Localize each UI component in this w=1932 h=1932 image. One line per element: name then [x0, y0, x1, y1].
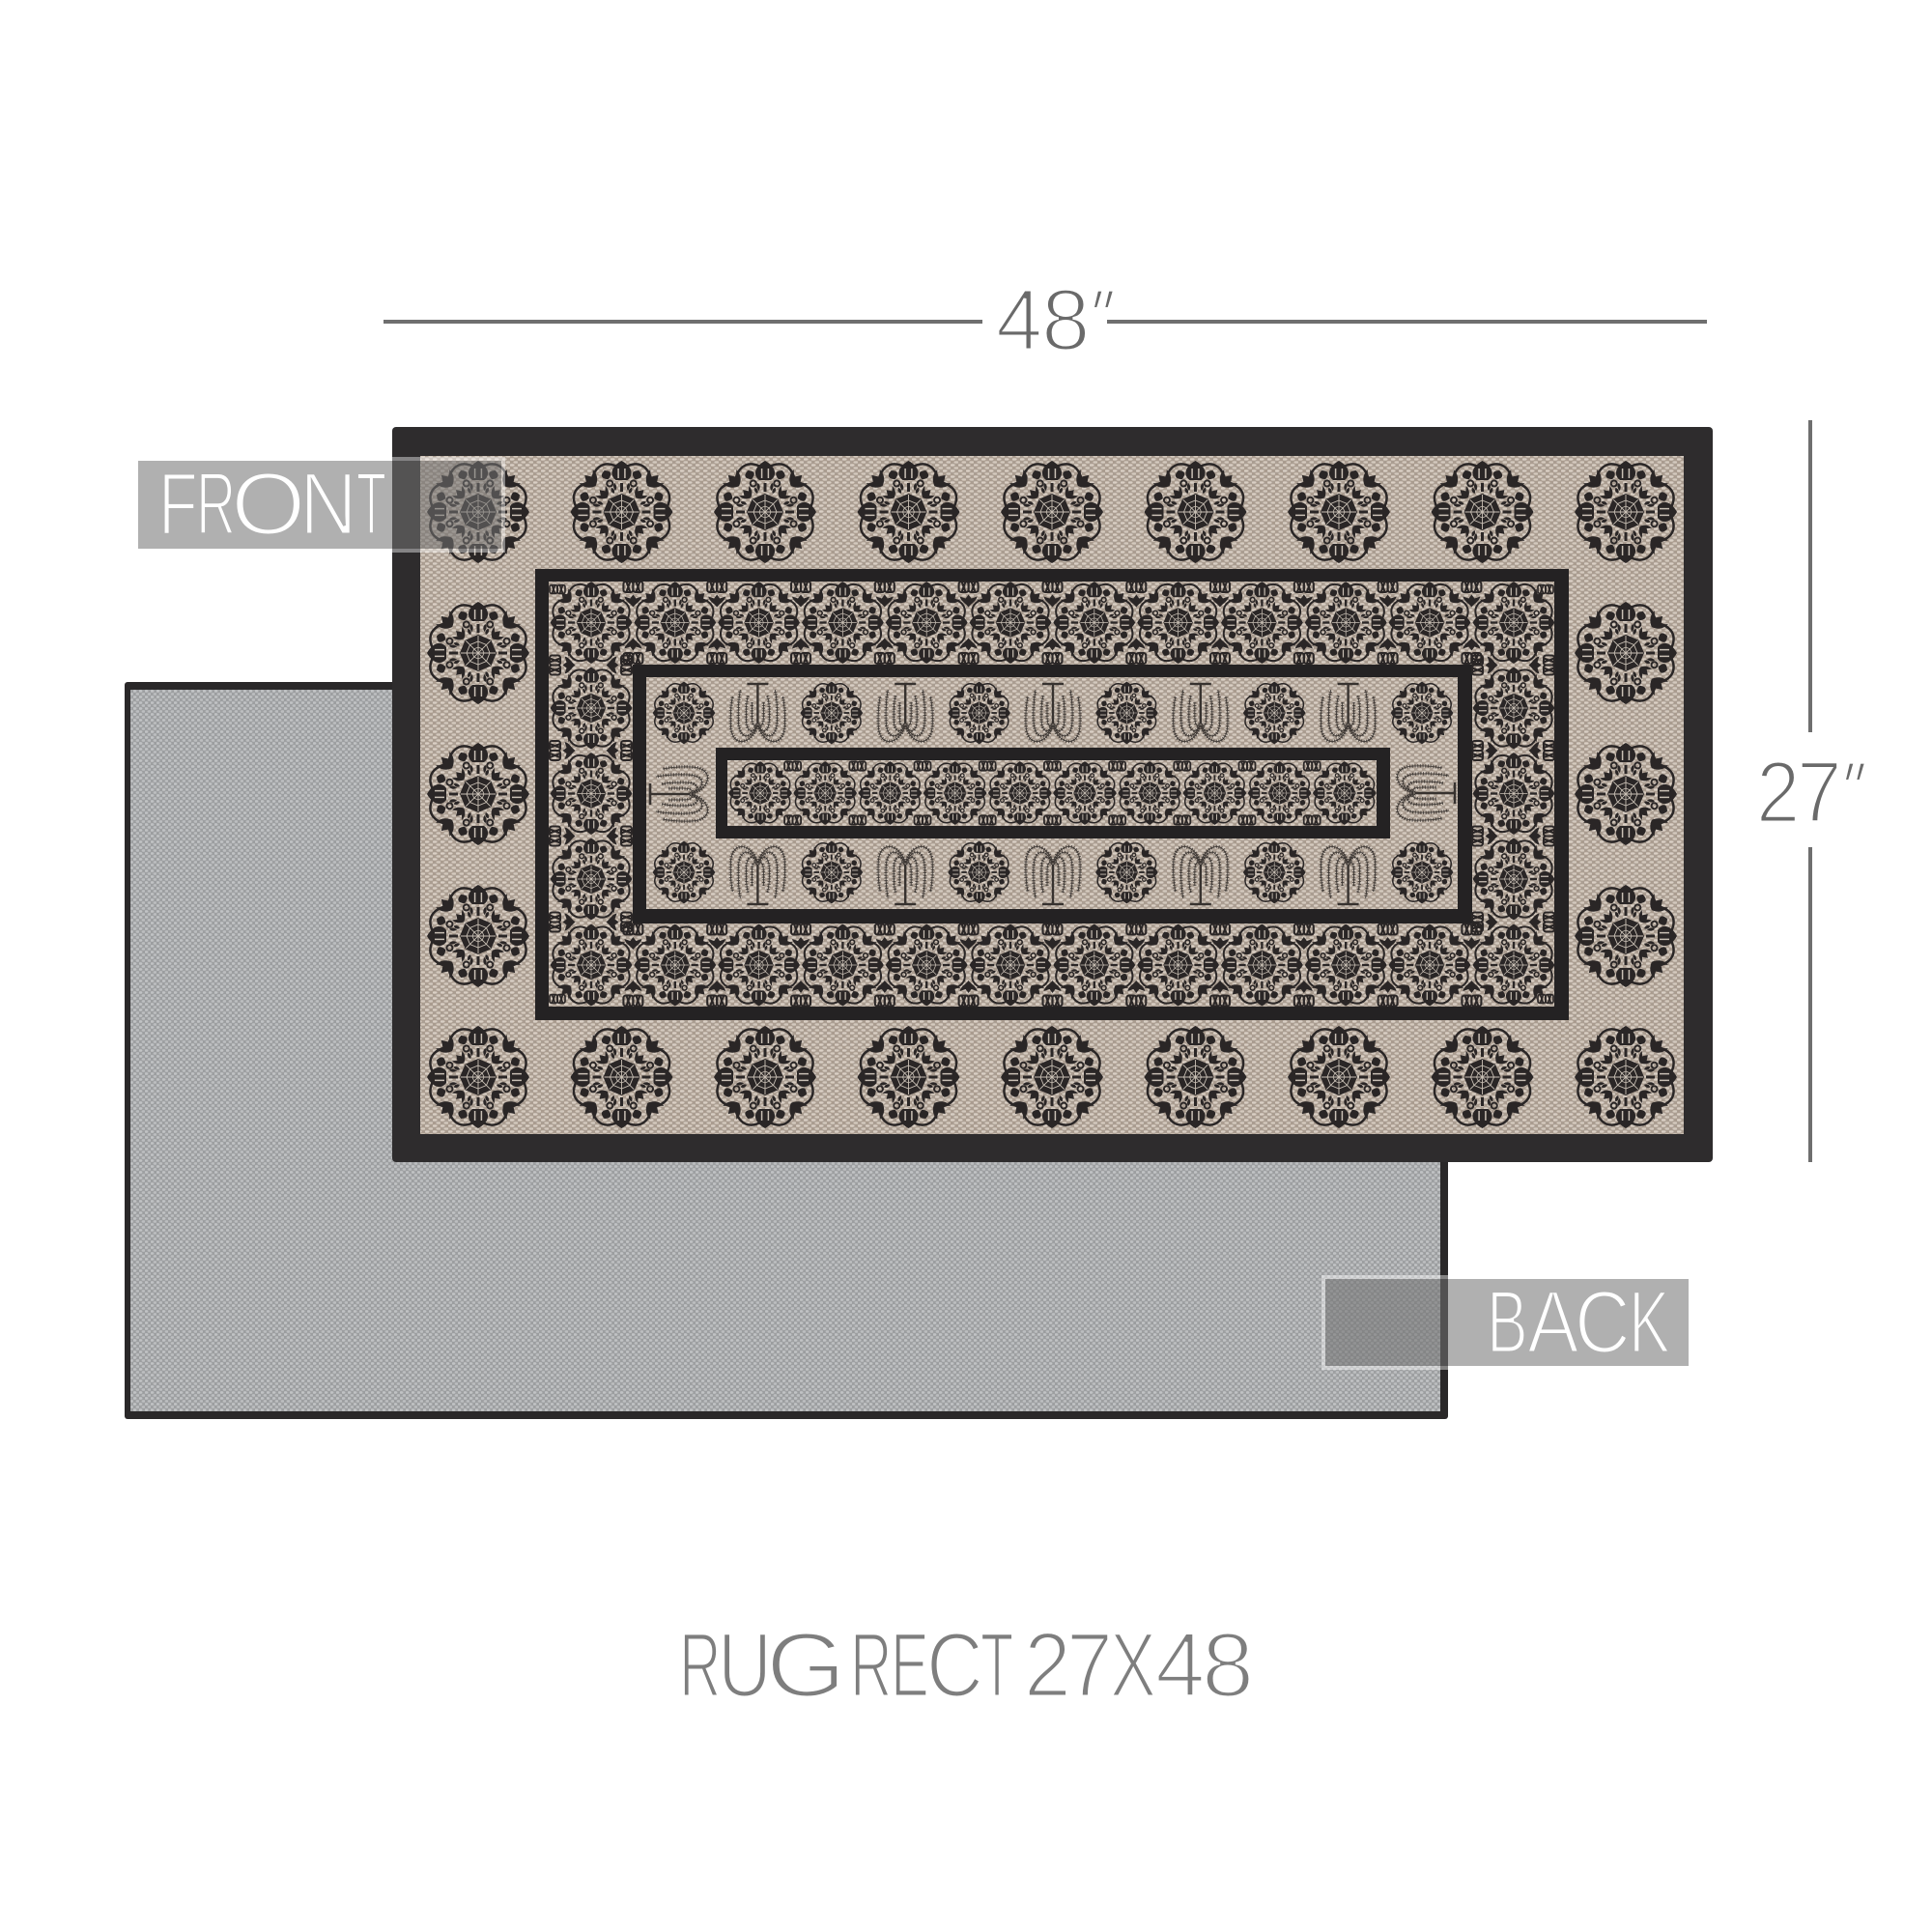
product caption: 7 — [1066, 1614, 1113, 1717]
BACK label text: K — [1629, 1273, 1670, 1372]
front of rug — [392, 427, 1713, 1162]
product caption: 2 — [1024, 1614, 1071, 1717]
woven beige field — [420, 456, 1684, 1134]
center medallion strip — [727, 760, 1377, 826]
dense medallion band — [550, 581, 1555, 1007]
height label 27 inches: 7 — [1797, 745, 1842, 841]
FRONT label text: O — [231, 455, 305, 554]
BACK label text: C — [1575, 1273, 1631, 1372]
product caption — [679, 1614, 1254, 1717]
black frame: center band — [716, 748, 1390, 838]
product caption: E — [891, 1614, 929, 1717]
outer medallion ring — [426, 460, 1678, 1129]
product caption: C — [926, 1614, 982, 1717]
BACK label text: B — [1487, 1273, 1527, 1372]
product caption: T — [980, 1614, 1013, 1717]
black frame: outer band — [535, 569, 1569, 1020]
height label 27 inches: 2 — [1756, 745, 1800, 841]
back of rug — [125, 682, 1448, 1419]
FRONT label text: N — [299, 455, 357, 554]
product caption: R — [679, 1614, 722, 1717]
FRONT label text: R — [195, 455, 236, 554]
BACK label text — [1487, 1273, 1670, 1372]
product caption: 8 — [1202, 1614, 1254, 1717]
outer black binding — [392, 427, 1713, 1162]
product caption: U — [718, 1614, 772, 1717]
height label 27 inches: " — [1826, 745, 1873, 841]
product caption: X — [1110, 1614, 1156, 1717]
height label 27 inches — [1756, 745, 1873, 841]
FRONT label text: F — [158, 455, 197, 554]
width label 48 inches — [996, 272, 1122, 369]
back woven surface — [130, 690, 1440, 1411]
width label 48 inches: " — [1074, 272, 1122, 369]
FRONT label text: T — [356, 455, 386, 554]
back label box — [1321, 1275, 1692, 1370]
product caption: R — [850, 1614, 893, 1717]
width label 48 inches: 4 — [996, 272, 1043, 369]
width label 48 inches: 8 — [1041, 272, 1090, 369]
width dimension line — [384, 320, 1707, 324]
black frame: middle band — [633, 665, 1472, 923]
product caption: 4 — [1155, 1614, 1206, 1717]
product caption: G — [766, 1614, 846, 1717]
willow trees — [650, 684, 1455, 904]
height dimension line — [1808, 420, 1812, 1162]
front label box — [134, 457, 505, 553]
FRONT label text — [158, 455, 386, 554]
inner medallion rows — [652, 681, 1454, 904]
BACK label text: A — [1527, 1273, 1578, 1372]
